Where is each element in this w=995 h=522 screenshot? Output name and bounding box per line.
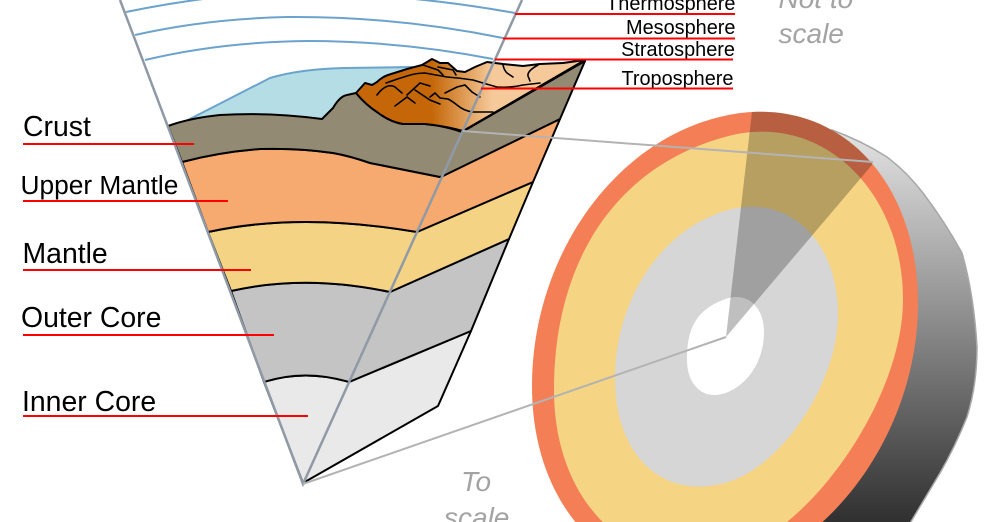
- disc outer core: [615, 178, 838, 514]
- disc side with gradient: [800, 130, 977, 522]
- ocean: [188, 67, 425, 120]
- label: Outer Core: Outer Core: [21, 302, 161, 334]
- connector lines to disc: [303, 131, 873, 484]
- note: To scale: [444, 466, 509, 522]
- disc inner core: [687, 285, 764, 407]
- atmosphere arcs: [126, 0, 515, 60]
- mountains: [356, 59, 585, 131]
- upper mantle layer: [182, 119, 560, 232]
- earth disc cross-section: [532, 74, 977, 522]
- cone edges: [120, 0, 522, 484]
- label: Mantle: Mantle: [22, 238, 108, 270]
- cone cutaway of earth layers: [120, 0, 585, 484]
- inner core layer: [264, 331, 471, 483]
- label: Troposphere: Troposphere: [621, 68, 734, 90]
- label: Crust: Crust: [23, 111, 91, 143]
- note: Not to scale: [778, 0, 853, 49]
- disc crust ring: [532, 74, 918, 522]
- label: Upper Mantle: Upper Mantle: [20, 170, 178, 200]
- highlighted wedge: [726, 112, 872, 337]
- outer core layer: [231, 239, 509, 382]
- disc mantle: [554, 91, 903, 522]
- label: Mesosphere: Mesosphere: [626, 17, 736, 39]
- label: Stratosphere: Stratosphere: [621, 39, 735, 61]
- mantle layer: [208, 182, 533, 292]
- mountain ridge lines: [377, 65, 540, 112]
- crust layer: [168, 61, 585, 177]
- note: Not to scale: scale: [778, 18, 844, 49]
- label: Inner Core: Inner Core: [22, 386, 156, 418]
- note: To scale: To: [461, 466, 491, 497]
